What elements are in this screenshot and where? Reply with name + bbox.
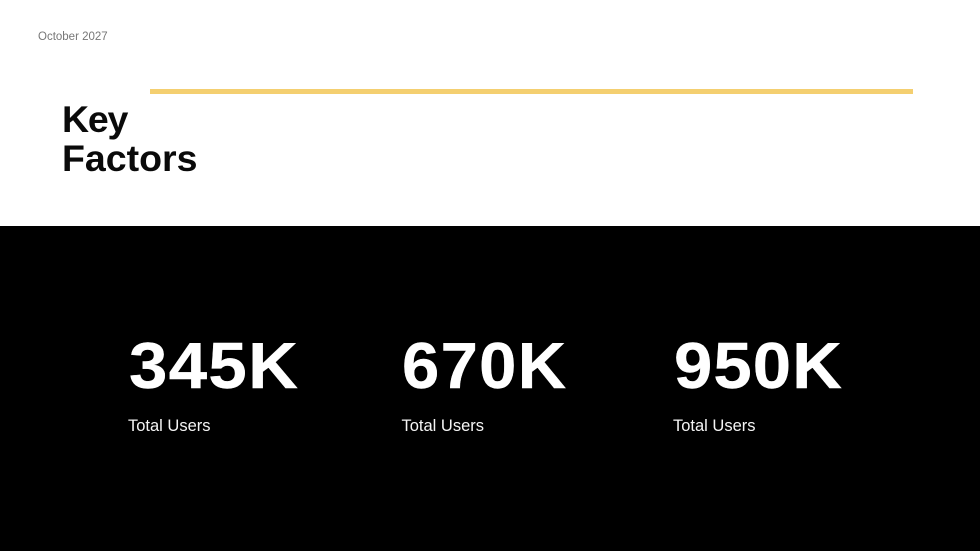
caption: Total Users bbox=[402, 417, 484, 435]
date label: October 2027 bbox=[38, 30, 108, 42]
stat: 670K bbox=[402, 328, 567, 435]
value: 345K bbox=[128, 328, 299, 402]
value: 670K bbox=[402, 328, 567, 402]
title: Key bbox=[62, 98, 127, 140]
value: 950K bbox=[674, 328, 843, 402]
black panel bbox=[0, 226, 980, 551]
stat: 950K bbox=[673, 328, 843, 435]
title: Factors bbox=[62, 136, 197, 178]
title bbox=[62, 98, 197, 178]
caption: Total Users bbox=[673, 417, 756, 435]
yellow accent bar bbox=[150, 89, 913, 94]
caption: Total Users bbox=[128, 417, 211, 435]
stat: 345K bbox=[128, 328, 299, 435]
